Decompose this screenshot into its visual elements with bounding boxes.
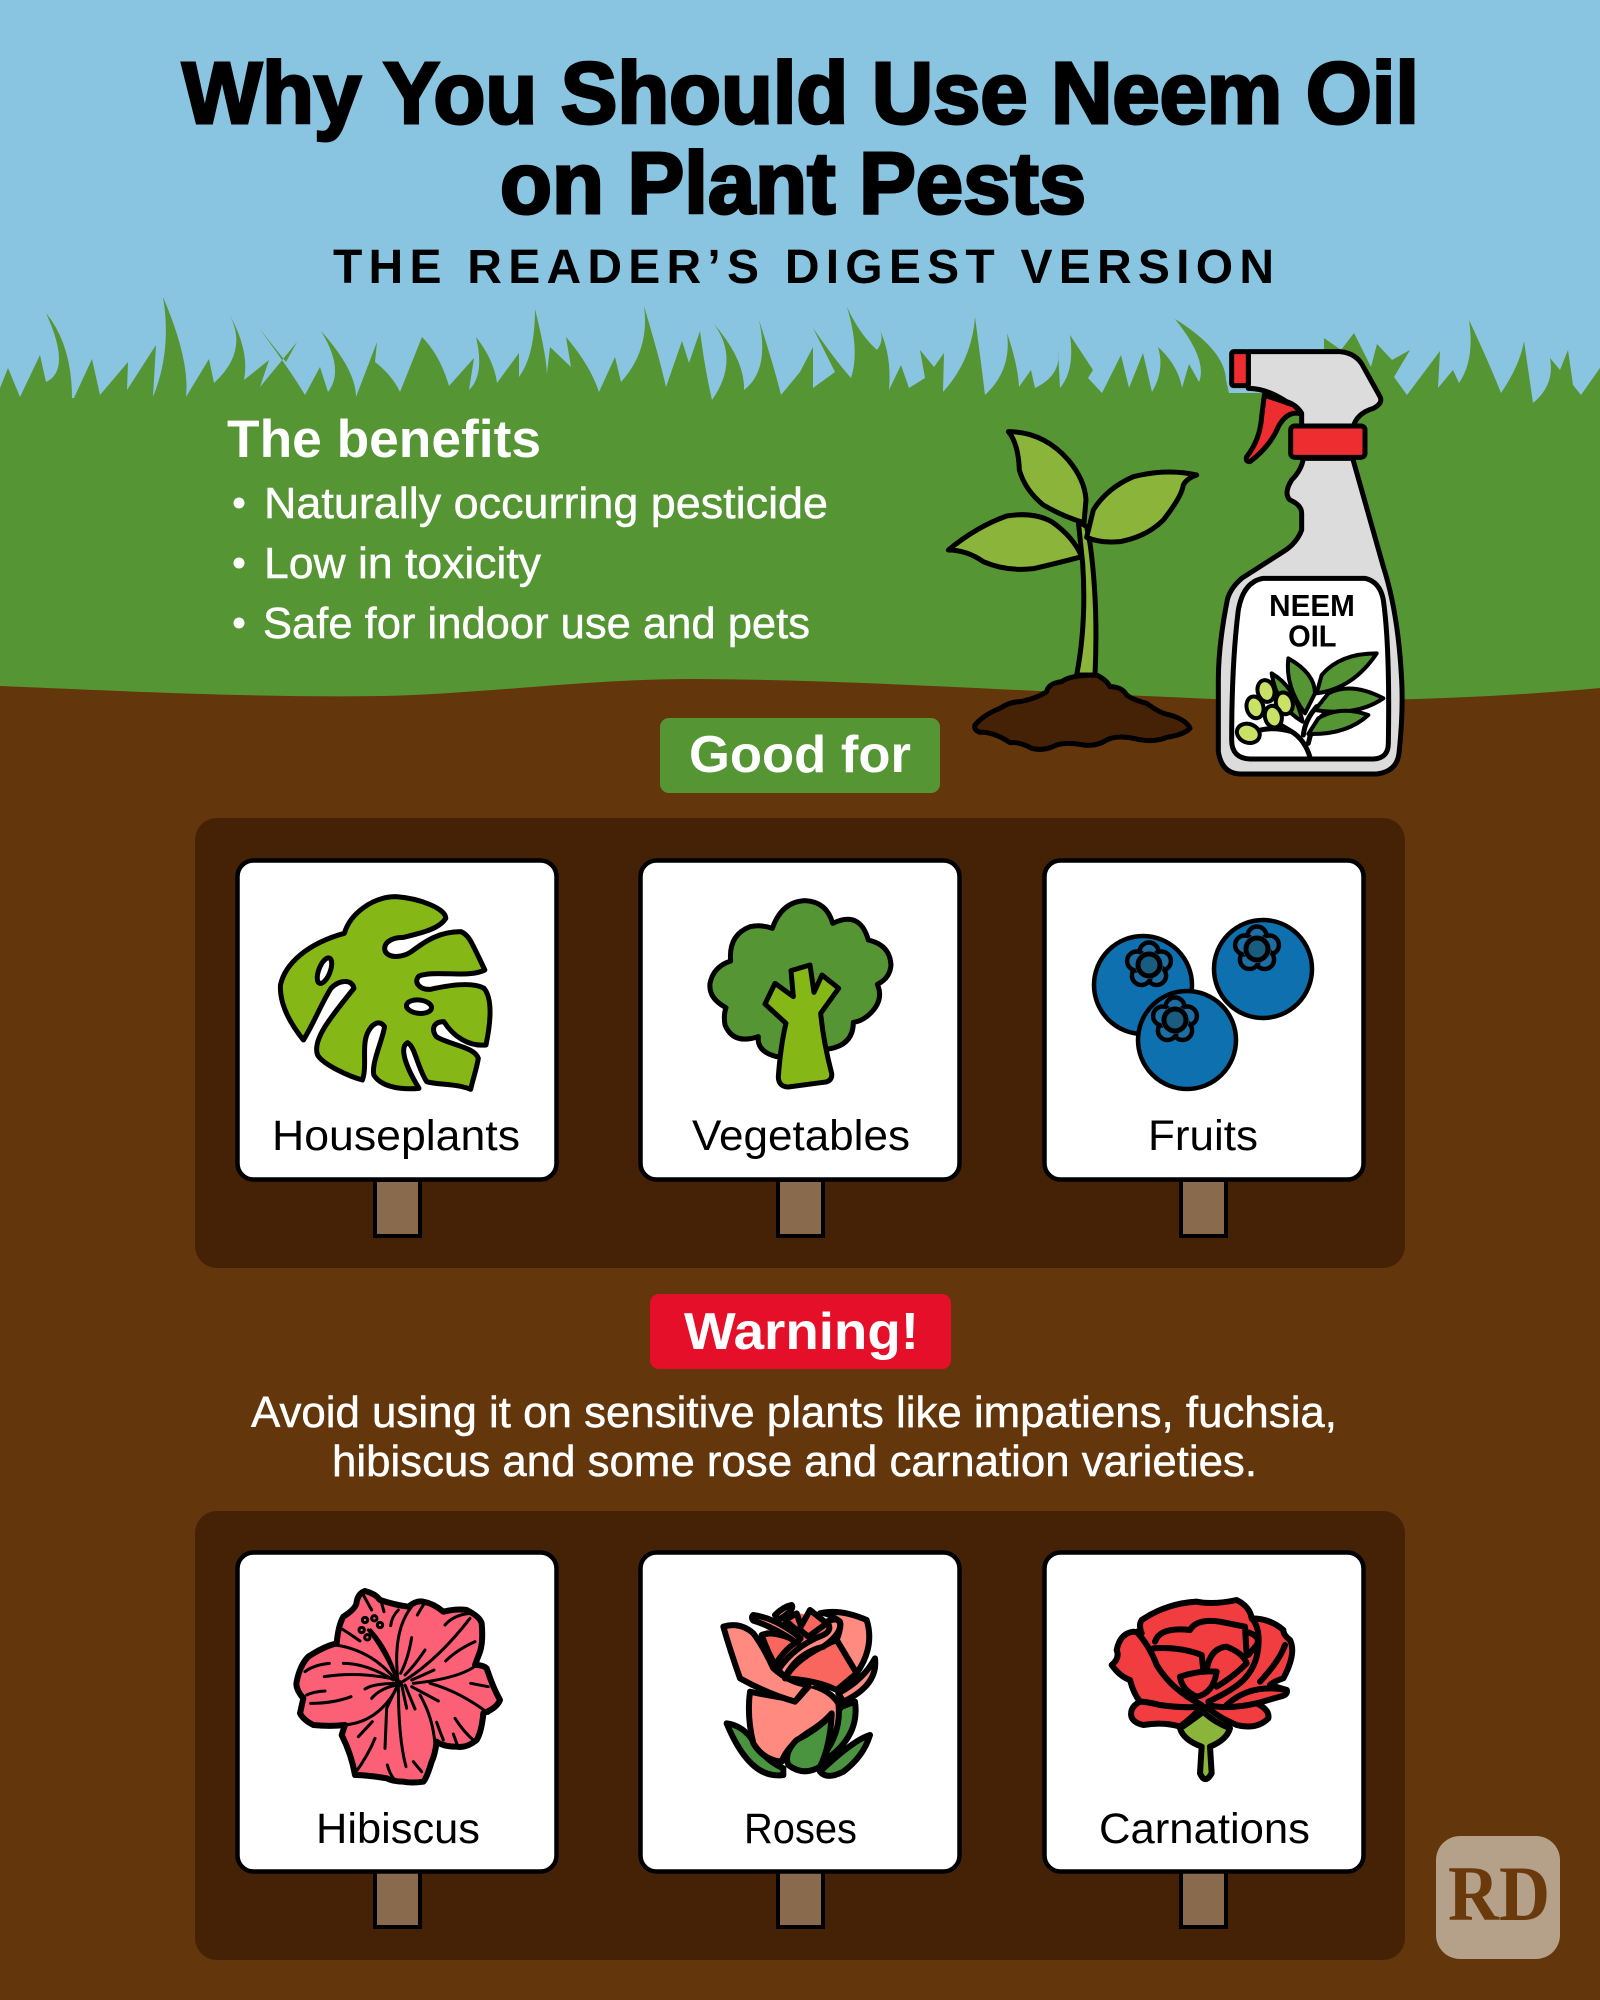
warning text: hibiscus and some rose and carnation varieties. [332,1437,1257,1486]
heading badge: warning: Warning! [684,1303,919,1361]
icon: blueberries [1094,920,1312,1089]
label: houseplants: Houseplants [272,1112,520,1160]
spray head [1248,352,1381,427]
benefits list: Naturally occurring pesticide [264,479,828,528]
label: fruits: Fruits [1148,1112,1258,1160]
card: carnations [1044,1552,1364,1927]
bottle label text line 2: OIL [1288,620,1336,654]
bottle label text: NEEM [1269,589,1355,623]
label: carnations: Carnations [1099,1805,1310,1853]
title [182,45,1419,232]
card: hibiscus [238,1552,556,1927]
benefits heading: The benefits [227,410,541,469]
icon: broccoli [710,901,891,1087]
grass [0,297,1600,720]
icon: neem oil spray bottle [1218,352,1402,774]
card: fruits [1044,860,1364,1236]
card: roses [640,1552,960,1927]
label: hibiscus: Hibiscus [316,1805,480,1853]
benefits list: Safe for indoor use and pets [263,599,810,648]
panel: good for [195,818,1405,1268]
title: on Plant Pests [500,135,1086,232]
benefits list [234,479,828,648]
benefits list: Low in toxicity [264,539,541,588]
heading badge: good for: Good for [689,726,911,784]
neem sprig [1234,653,1383,757]
icon: seedling in soil [948,432,1197,749]
logo: RD badge: RD [1448,1850,1550,1937]
bottle body [1218,458,1402,774]
card: vegetables [640,860,960,1236]
warning text: Avoid using it on sensitive plants like impatiens, fuchsia, [251,1388,1337,1437]
nozzle [1232,352,1248,386]
panel: avoid [195,1511,1405,1960]
heading badge: good for [660,718,940,793]
label [1232,578,1389,759]
icon: monstera leaf [280,897,490,1089]
trigger [1246,395,1299,462]
icon: carnation [1112,1600,1292,1779]
icon: rose [723,1605,875,1776]
logo: RD badge [1436,1836,1560,1959]
subtitle: THE READER’S DIGEST VERSION [333,241,1274,294]
sky background [0,0,1600,720]
label: roses: Roses [744,1805,857,1853]
title: Why You Should Use Neem Oil [182,45,1419,142]
card: houseplants [238,860,556,1236]
warning text [251,1388,1337,1486]
label: vegetables: Vegetables [692,1112,910,1160]
icon: hibiscus flower [296,1591,500,1782]
heading badge: warning [650,1294,951,1369]
soil [0,679,1600,2000]
collar [1291,426,1365,457]
